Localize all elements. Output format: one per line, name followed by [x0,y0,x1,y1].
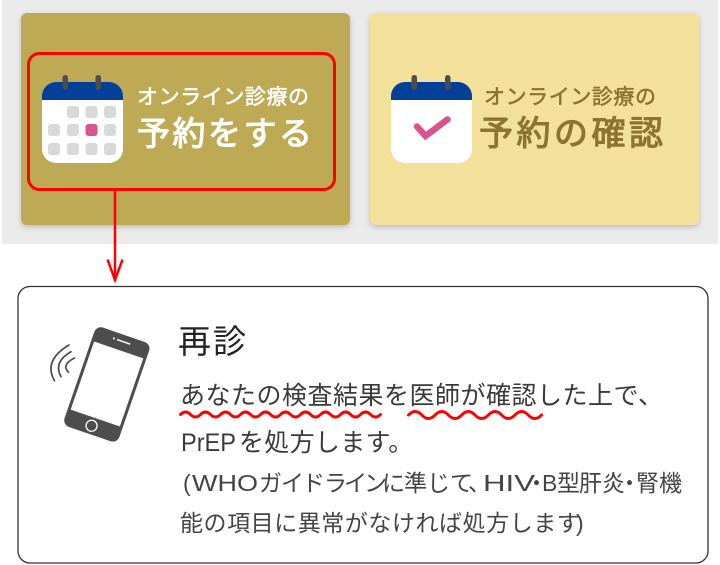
note text: ・B型肝炎・腎機 [525,470,682,496]
red wavy underlines [180,412,541,418]
body text: あなたの検査結果を医師が確認した上で、 [180,382,664,410]
body text: を処方します。 [239,429,414,457]
button caption: オンライン診療の [484,86,656,109]
arrow [108,190,122,281]
heading: 再診 [178,323,246,360]
icon: vibrating smartphone [51,325,151,444]
panel: book appointment button [21,13,350,225]
icon: calendar with grid [42,75,123,163]
panel: confirm appointment button [370,13,699,225]
button caption: オンライン診療の [137,86,309,109]
icon: calendar with check mark [391,75,472,163]
button label: 予約の確認 [479,115,663,153]
note text: HIV [483,470,536,496]
panel: revisit details [18,286,708,563]
note text: ) [576,510,584,536]
note text: WHO [192,470,258,496]
note text: 能の項目に異常がなければ処方します [180,510,580,536]
body text [180,382,682,536]
note text: ガイドラインに準じて、 [259,470,491,496]
button label: 予約をする [137,115,312,152]
note text [180,470,682,536]
callout: red highlight frame [28,54,334,190]
background band [2,0,718,244]
body text: PrEP [181,429,236,457]
note text: ( [183,470,191,496]
